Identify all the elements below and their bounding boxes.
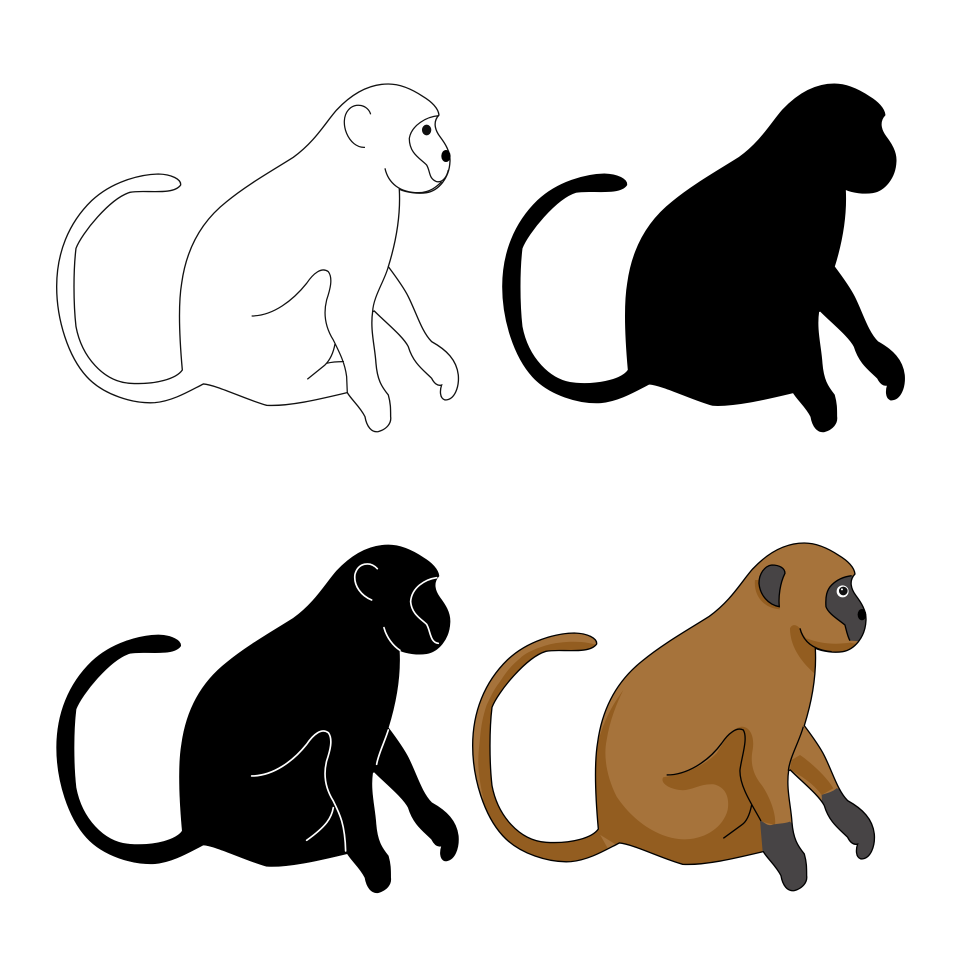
face, hand and foot patches: [760, 576, 874, 890]
monkey: thin line-art outline: [57, 84, 458, 432]
ear patch: [759, 565, 785, 607]
body shading: [478, 580, 860, 870]
body base colour: [473, 543, 874, 891]
tail shading: [478, 642, 608, 861]
outline and contour lines: [473, 543, 874, 891]
monkey: full colour brown: [473, 543, 893, 897]
monkey: plain black silhouette: [503, 84, 904, 432]
monkey: black silhouette with white detail lines: [57, 545, 458, 893]
illustration: four monkey variations: [56, 83, 905, 894]
shading and dark patches clipped to the body: [478, 576, 893, 897]
eye and nose: [837, 585, 866, 620]
